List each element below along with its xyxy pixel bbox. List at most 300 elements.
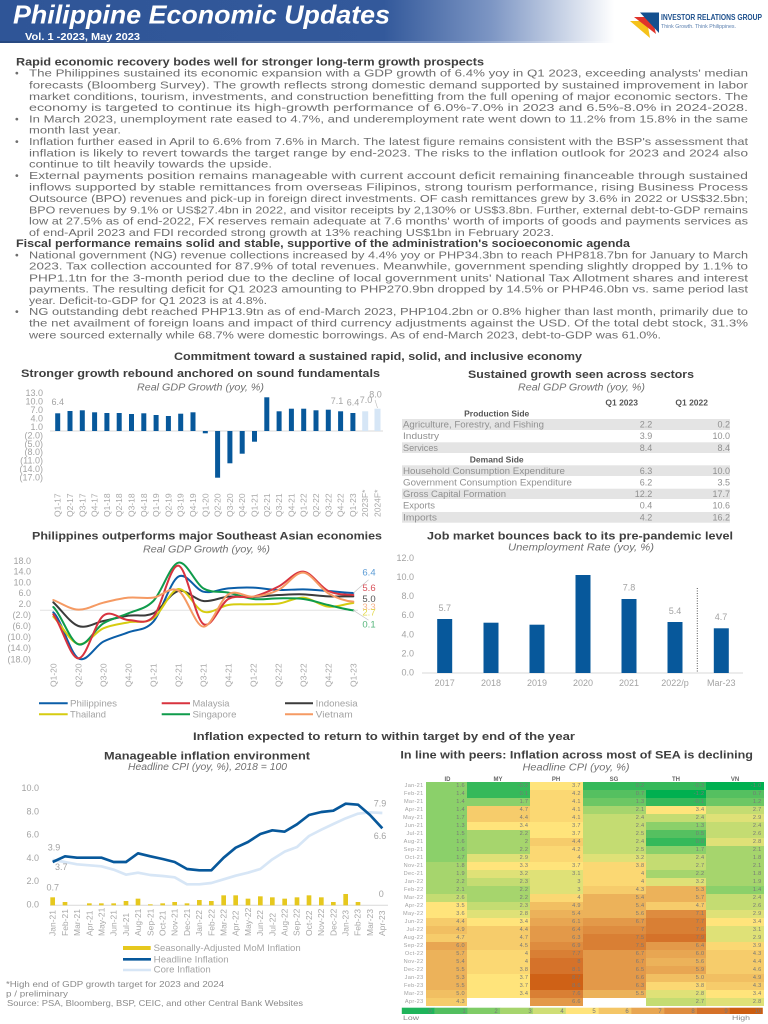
bullet: inflation: inflation is likely to revert towards the target range by end-2023. The risks to the inflation outlook for 2023 and 2024 also	[29, 147, 748, 159]
value labels: 3.7	[55, 862, 68, 872]
heatmap table: 4	[525, 959, 528, 965]
heatmap table: 4.7	[520, 807, 528, 813]
logo: Investor Relations Group: Think Growth. Think Philippines.	[661, 24, 736, 30]
heatmap table: 2.2	[520, 831, 528, 837]
heatmap legend: 4	[560, 1009, 564, 1015]
heatmap table: 3.2	[636, 855, 644, 861]
heatmap table: Aug-21	[404, 839, 424, 845]
heatmap table: 2.1	[753, 863, 762, 869]
x axis labels: Nov-22	[316, 908, 326, 936]
heatmap table: 2.8	[696, 991, 704, 997]
heatmap table: 4.3	[753, 983, 762, 989]
column headers: Production Side	[464, 408, 530, 418]
x axis labels: Q1-20	[48, 663, 58, 687]
heatmap table: 3.2	[520, 871, 528, 877]
heatmap table: 2.9	[753, 935, 762, 941]
line: Thailand	[53, 589, 353, 644]
heatmap table: 6.4	[696, 943, 704, 949]
x axis labels: Q4-21	[286, 493, 296, 517]
heatmap table: 2.7	[696, 863, 704, 869]
y axis labels: 4.0	[26, 853, 39, 863]
table rows: Government Consumption Expenditure	[403, 477, 572, 487]
x axis labels: Q4-21	[223, 663, 233, 687]
heatmap table: 5.3	[696, 887, 704, 893]
x axis labels: Q3-18	[126, 493, 136, 517]
x axis labels: Q2-17	[65, 493, 75, 517]
bullet: GDP growth: economy is targeted to continue its high-growth performance of 6.0%-7.0% in 2023 and 6.5%-8.0% in 2024-2028.	[29, 102, 748, 114]
heatmap legend: Low	[403, 1015, 419, 1022]
heatmap table: 3.4	[520, 991, 528, 997]
heatmap table: 4.9	[572, 903, 581, 909]
table rows: 10.6	[712, 501, 730, 511]
heatmap legend: 3	[528, 1009, 532, 1015]
table rows: Exports	[403, 501, 436, 511]
x axis labels: Q3-22	[323, 493, 333, 517]
heatmap table: 1.9	[753, 879, 762, 885]
heatmap table: 7.1	[696, 911, 704, 917]
y axis labels: 6.0	[26, 830, 39, 840]
x axis labels: 2024F*	[372, 489, 382, 517]
heatmap table: 2.5	[636, 847, 644, 853]
x axis labels	[435, 678, 736, 688]
bullet: external payments: External payments position remains manageable with current account deficit remaining financeable through sustained	[29, 170, 748, 182]
x axis labels: May-22	[243, 907, 253, 936]
bullet: GDP growth	[15, 68, 749, 114]
heatmap table: 3.9	[753, 943, 762, 949]
x axis labels: Q1-21	[250, 493, 260, 517]
heatmap table: 4.3	[753, 951, 762, 957]
table rows: Agriculture, Forestry, and Fishing	[403, 420, 544, 430]
x axis labels: Q2-20	[213, 493, 223, 517]
column headers: ID	[444, 777, 451, 783]
heatmap table: 0.0	[696, 839, 704, 845]
chart subtitle: Real GDP Growth (yoy, %)	[143, 544, 270, 556]
x axis labels: Q1-19	[151, 493, 161, 517]
x axis labels: Oct-22	[304, 910, 314, 936]
heatmap table: 3.4	[520, 919, 528, 925]
heatmap table: 2.6	[456, 895, 465, 901]
x axis labels: Jan-21	[48, 910, 58, 936]
heatmap table: 2.2	[520, 887, 528, 893]
heatmap table: Oct-21	[405, 855, 424, 861]
x axis labels	[48, 663, 358, 687]
heatmap table: 0.5	[696, 831, 704, 837]
heatmap table: -0.3	[694, 783, 704, 789]
y axis labels: 13.0	[25, 388, 43, 398]
bullet: external payments: inflows supported by stable remittances from overseas Filipinos, strong tourism performance, rising Business Process	[29, 182, 748, 194]
panel: inflation heatmap heading	[400, 749, 753, 783]
heatmap table: Mar-22	[404, 895, 424, 901]
row bands	[402, 419, 730, 523]
legend	[123, 943, 301, 974]
heatmap table: 5.7	[696, 895, 704, 901]
heatmap table: 4.5	[520, 943, 528, 949]
y axis labels	[21, 783, 39, 910]
y axis labels	[19, 388, 43, 483]
heatmap table: 2.1	[456, 887, 465, 893]
y axis labels: 2.0	[26, 876, 39, 886]
heatmap table: Sep-21	[404, 847, 424, 853]
x axis labels: Apr-22	[231, 910, 241, 936]
y axis labels: 10.0	[13, 577, 31, 587]
heatmap table: 7.5	[636, 943, 644, 949]
heatmap table: 1.3	[456, 823, 465, 829]
x axis labels: Apr-21	[84, 910, 94, 936]
heatmap table: Jun-21	[405, 823, 424, 829]
heatmap table: 2.4	[636, 815, 644, 821]
heatmap table: 6.7	[636, 959, 644, 965]
heatmap table: 5.4	[636, 895, 644, 901]
heatmap table: Jul-21	[406, 831, 424, 837]
bullet: GDP growth: market conditions, tourism, investments, and construction benefitting from the full opening of major economic sectors. The	[29, 91, 748, 103]
heatmap table: 2.8	[753, 999, 762, 1005]
heatmap table: 6.4	[572, 927, 581, 933]
column headers: Demand Side	[470, 455, 524, 465]
x axis labels: Q1-22	[299, 493, 309, 517]
heatmap table: 5.0	[696, 975, 704, 981]
value labels: 7.1	[331, 396, 343, 406]
heatmap table: 6.5	[636, 967, 644, 973]
panel: real GDP growth bar chart	[19, 368, 383, 517]
column headers: SG	[610, 777, 619, 783]
line: Malaysia	[53, 566, 353, 658]
legend: Vietnam	[316, 710, 353, 720]
x axis labels: Oct-21	[158, 910, 168, 936]
lines	[53, 563, 368, 659]
heatmap table: 3.7	[520, 975, 528, 981]
heatmap table: 1.3	[696, 823, 704, 829]
bullet: inflation: Inflation further eased in April to 6.6% from 7.6% in March. The latest figure remains consistent with the BSP's assessment that	[29, 136, 748, 148]
heatmap table: 2.2	[520, 847, 528, 853]
heatmap table: 5.4	[456, 959, 465, 965]
heatmap table: 1.7	[456, 855, 465, 861]
value labels: 6.4	[51, 397, 64, 407]
y axis labels: (17.0)	[19, 473, 43, 483]
heatmap table: 4.4	[456, 919, 465, 925]
legend: Thailand	[70, 710, 106, 720]
bullet: GDP growth: forecasts (Bloomberg Survey). The growth reflects strong domestic demand supported by sustained improvement in labor	[29, 79, 749, 91]
y axis labels	[7, 556, 31, 664]
x axis labels: May-21	[96, 907, 106, 936]
heatmap table: 5.6	[636, 911, 644, 917]
x axis labels: Q3-22	[298, 663, 308, 687]
panel: inflation chart	[21, 750, 388, 974]
line: core inflation	[53, 812, 382, 884]
table rows: 12.2	[635, 489, 652, 499]
heading: economic recovery: Rapid economic recovery bodes well for stronger long-term growth prospects	[16, 57, 484, 69]
text block: economic recovery	[15, 57, 749, 239]
heatmap table: 2.4	[753, 895, 762, 901]
x axis labels: Q1-20	[200, 493, 210, 517]
heatmap table: 1.4	[456, 799, 465, 805]
x axis labels: Mar-22	[218, 909, 228, 936]
bullet: revenue and deficit: 2023. Tax collection accounted for 87.9% of total revenues. Meanwhile, government spending slightly dropped by 1.1% to	[29, 261, 748, 273]
heatmap table: 3.6	[456, 911, 465, 917]
heatmap legend: High	[732, 1015, 751, 1022]
heatmap table: Apr-23	[405, 999, 424, 1005]
heatmap table: 7.7	[572, 951, 581, 957]
value labels: 3.9	[48, 842, 60, 852]
heatmap table: 0.7	[753, 791, 762, 797]
heatmap table: 6.3	[572, 935, 581, 941]
heatmap table: Apr-21	[405, 807, 424, 813]
table rows: 0.2	[717, 420, 730, 430]
heatmap table: 7.5	[636, 935, 644, 941]
y axis labels: 6.0	[18, 588, 31, 598]
heatmap table: 1.7	[520, 799, 528, 805]
y axis labels: 8.0	[26, 806, 39, 816]
heatmap table: 4	[525, 951, 528, 957]
bullet: external payments: low at 27.5% as of end-2022, FX reserves remain adequate at 7.6 months' worth of imports of goods and payments services as	[29, 216, 748, 228]
x axis labels: Q4-18	[139, 493, 149, 517]
legend: Headline Inflation	[154, 954, 229, 964]
y axis labels: (10.0)	[7, 632, 31, 642]
x axis labels: Jun-21	[109, 910, 119, 936]
bars: seasonally adjusted MoM	[50, 894, 360, 905]
heatmap legend: 2	[494, 1009, 498, 1015]
heatmap table: 2.1	[636, 807, 644, 813]
end value labels: 3.3	[362, 602, 376, 613]
y axis labels: 10.0	[25, 396, 43, 406]
value labels: 5.7	[438, 603, 451, 613]
x axis labels: Q4-17	[90, 493, 100, 517]
heatmap table: 4	[577, 855, 581, 861]
heatmap table: 3.4	[753, 919, 762, 925]
heatmap table: Jan-22	[405, 879, 424, 885]
chart subtitle: Unemployment Rate (yoy, %)	[508, 542, 654, 554]
heatmap table: Feb-23	[404, 983, 424, 989]
heatmap table: 5.3	[456, 975, 465, 981]
heatmap table: 1.6	[456, 783, 465, 789]
legend: Singapore	[192, 710, 236, 720]
x axis labels: Jan-23	[340, 910, 350, 936]
heatmap table: 8.7	[572, 975, 581, 981]
heatmap table: 4.4	[520, 815, 528, 821]
end value labels: 5.6	[362, 583, 376, 594]
heatmap table: Jul-22	[406, 927, 424, 933]
heatmap table: 4.1	[572, 815, 581, 821]
table subtitle: Real GDP Growth (yoy, %)	[518, 382, 645, 394]
value labels: 7.0	[360, 395, 372, 405]
y axis labels: (18.0)	[7, 654, 31, 664]
heatmap table: 5.4	[572, 911, 581, 917]
legend: Core Inflation	[154, 964, 211, 974]
y axis labels: (11.0)	[20, 456, 43, 466]
table rows: Gross Capital Formation	[403, 489, 506, 499]
table rows: 4.2	[640, 512, 652, 522]
column headers: VN	[731, 777, 739, 783]
heatmap table: 3.5	[456, 903, 465, 909]
x axis labels: Feb-21	[60, 909, 70, 936]
section heading: inflation: Inflation expected to return to within target by end of the year	[193, 731, 576, 743]
x axis labels: Dec-21	[182, 908, 192, 936]
heatmap table: 3.8	[520, 967, 528, 973]
value labels: 6.6	[374, 831, 386, 841]
column headers: MY	[494, 777, 502, 783]
x axis labels: 2023F*	[360, 489, 370, 517]
value labels	[46, 798, 386, 899]
heatmap legend: 6	[625, 1009, 629, 1015]
heatmap table: 6.7	[636, 951, 644, 957]
heatmap table: 4.2	[572, 847, 581, 853]
heatmap table: 2.4	[753, 823, 762, 829]
heatmap table: 3.7	[572, 783, 581, 789]
footnotes	[6, 979, 303, 1008]
heatmap table: 4	[641, 871, 644, 877]
heatmap table: 5.5	[456, 983, 465, 989]
y axis labels	[396, 553, 414, 678]
heatmap table: 7.9	[696, 935, 704, 941]
y axis labels: 2.0	[401, 648, 414, 658]
bullet: inflation: continue to tilt heavily towards the upside.	[29, 159, 272, 171]
heatmap table: 2.8	[520, 911, 528, 917]
heatmap table: May-21	[403, 815, 424, 821]
value labels	[438, 582, 727, 622]
heatmap table: Oct-22	[405, 951, 424, 957]
bullet: revenue and deficit	[15, 249, 748, 307]
heatmap table: 3.4	[696, 807, 704, 813]
y axis labels: 7.0	[30, 405, 43, 415]
x axis labels: Sep-22	[292, 908, 302, 936]
heatmap legend: 9	[724, 1009, 728, 1015]
heatmap table: 1.4	[753, 887, 762, 893]
title: Philippine Economic Updates	[13, 0, 390, 30]
heatmap table: 1.8	[456, 863, 465, 869]
x axis labels: Feb-22	[206, 909, 216, 936]
x axis labels: Mar-23	[707, 678, 736, 688]
heatmap table: 4.4	[572, 839, 581, 845]
heatmap table: -0.1	[694, 799, 704, 805]
heatmap table: 7.6	[572, 991, 581, 997]
heatmap table: 5.9	[696, 967, 704, 973]
chart title: Manageable inflation environment	[104, 750, 310, 762]
heatmap table: 6.7	[636, 919, 644, 925]
heatmap table: 4	[577, 895, 581, 901]
x axis labels: 2022/p	[661, 678, 689, 688]
x axis labels: Q1-18	[102, 493, 112, 517]
heatmap table: 5.0	[456, 991, 465, 997]
chart title: In line with peers: Inflation across most of SEA is declining	[400, 749, 753, 761]
footnotes: Source: PSA, Bloomberg, BSP, CEIC, and other Central Bank Websites	[7, 998, 303, 1008]
table rows: 10.0	[712, 431, 730, 441]
heatmap table: 1.6	[456, 839, 465, 845]
heatmap table: 4.9	[753, 975, 762, 981]
x axis labels: Jun-22	[255, 910, 265, 936]
x axis labels: Q4-20	[123, 663, 133, 687]
heatmap table: 6.0	[456, 943, 465, 949]
bullet: revenue and deficit: PHP1.1tn for the 3-month period due to the decline of local government units' National Tax Allotment shares and interest	[29, 273, 748, 285]
heatmap table: 1.5	[456, 831, 465, 837]
heatmap table: 4.6	[753, 967, 762, 973]
heatmap table: 4	[641, 879, 644, 885]
heatmap table: Nov-21	[404, 863, 424, 869]
y axis labels: 8.0	[401, 591, 414, 601]
heatmap table: 4.7	[696, 903, 704, 909]
y axis labels: 18.0	[13, 556, 31, 566]
table rows: 2.2	[640, 420, 652, 430]
value labels	[51, 390, 382, 408]
end value labels: 5.0	[362, 594, 376, 605]
legend	[39, 698, 358, 720]
x axis labels: 2021	[619, 678, 639, 688]
x axis labels: Q1-23	[348, 663, 358, 687]
line: headline inflation	[53, 804, 382, 870]
table rows: 6.3	[640, 466, 652, 476]
x axis labels: Q1-17	[53, 493, 63, 517]
table rows: 6.2	[640, 477, 652, 487]
table rows: 8.4	[640, 443, 652, 453]
heatmap table: 2.5	[636, 831, 644, 837]
x axis labels: Q4-22	[323, 663, 333, 687]
heatmap table: Nov-22	[404, 959, 424, 965]
heatmap table: 6.6	[636, 975, 644, 981]
x axis labels: Sep-21	[145, 908, 155, 936]
heatmap table: 2.9	[520, 855, 528, 861]
heatmap table: 7.6	[696, 927, 704, 933]
heatmap legend: 7	[658, 1009, 662, 1015]
heatmap table: 3.7	[572, 831, 581, 837]
panel: sector growth table	[402, 369, 730, 523]
bullet: revenue and deficit: year. Deficit-to-GDP for Q1 2023 is at 4.8%.	[29, 295, 267, 307]
y axis labels: 10.0	[396, 572, 414, 582]
panel: Southeast Asia line chart	[7, 530, 382, 720]
bullet: outstanding debt: were sourced externally while 68.7% were domestic borrowings. As of end-March 2023, debt-to-GDP was 61.0%.	[28, 329, 661, 341]
legend: Indonesia	[316, 698, 358, 708]
heatmap table: 2.4	[636, 823, 644, 829]
heatmap table: 6.0	[696, 951, 704, 957]
heatmap legend: 8	[691, 1009, 695, 1015]
table rows	[403, 420, 730, 522]
table rows: 8.4	[717, 443, 730, 453]
value labels: 7.8	[623, 582, 635, 592]
value labels: 6.4	[347, 398, 359, 408]
bullet: external payments: BPO revenues by 9.1% or US$27.4bn in 2022, and visitor receipts by 2,130% or US$3.8bn. Further, external debt-to-GDP remains	[29, 204, 748, 216]
heatmap table: 4.9	[456, 927, 465, 933]
panel: unemployment bar chart	[396, 530, 743, 688]
heatmap table: 2.8	[753, 839, 762, 845]
x axis labels: Q1-22	[248, 663, 258, 687]
x axis labels	[53, 489, 382, 517]
legend: Seasonally-Adjusted MoM Inflation	[154, 943, 301, 953]
value labels: 8.0	[369, 390, 382, 400]
heading: fiscal performance: Fiscal performance remains solid and stable, supportive of the administration's socioeconomic agenda	[16, 238, 631, 250]
heatmap table: 2.7	[753, 807, 762, 813]
table title: Sustained growth seen across sectors	[468, 369, 694, 381]
heatmap table: 3.8	[696, 983, 704, 989]
x axis labels: Q2-19	[163, 493, 173, 517]
heatmap table: 3.4	[520, 823, 528, 829]
column headers: TH	[672, 777, 680, 783]
y axis labels: (2.0)	[12, 610, 31, 620]
column headers: PH	[552, 777, 560, 783]
x axis labels: Dec-22	[328, 908, 338, 936]
x axis labels: 2020	[573, 678, 593, 688]
x axis labels: Q3-19	[176, 493, 186, 517]
line: Philippines	[53, 576, 353, 659]
value labels: 7.9	[374, 798, 386, 808]
bullet: inflation: •	[15, 136, 19, 148]
bullet: unemployment: month last year.	[29, 125, 121, 137]
bullet: GDP growth: The Philippines sustained its economic expansion with a GDP growth of 6.4% yoy in Q1 2023, exceeding analysts' median	[29, 68, 748, 80]
x axis labels: Q3-20	[98, 663, 108, 687]
heatmap table: 1.9	[456, 871, 465, 877]
bullet: unemployment: In March 2023, unemployment rate eased to 4.7%, and underemployment rate went down to 11.2% from 15.8% in the same	[29, 113, 748, 125]
bullet: revenue and deficit: •	[15, 249, 19, 261]
bullet: external payments: •	[15, 170, 19, 182]
end value labels: 0.1	[362, 620, 376, 631]
heatmap table: 1.2	[753, 799, 762, 805]
end value labels: 2.7	[362, 608, 376, 619]
